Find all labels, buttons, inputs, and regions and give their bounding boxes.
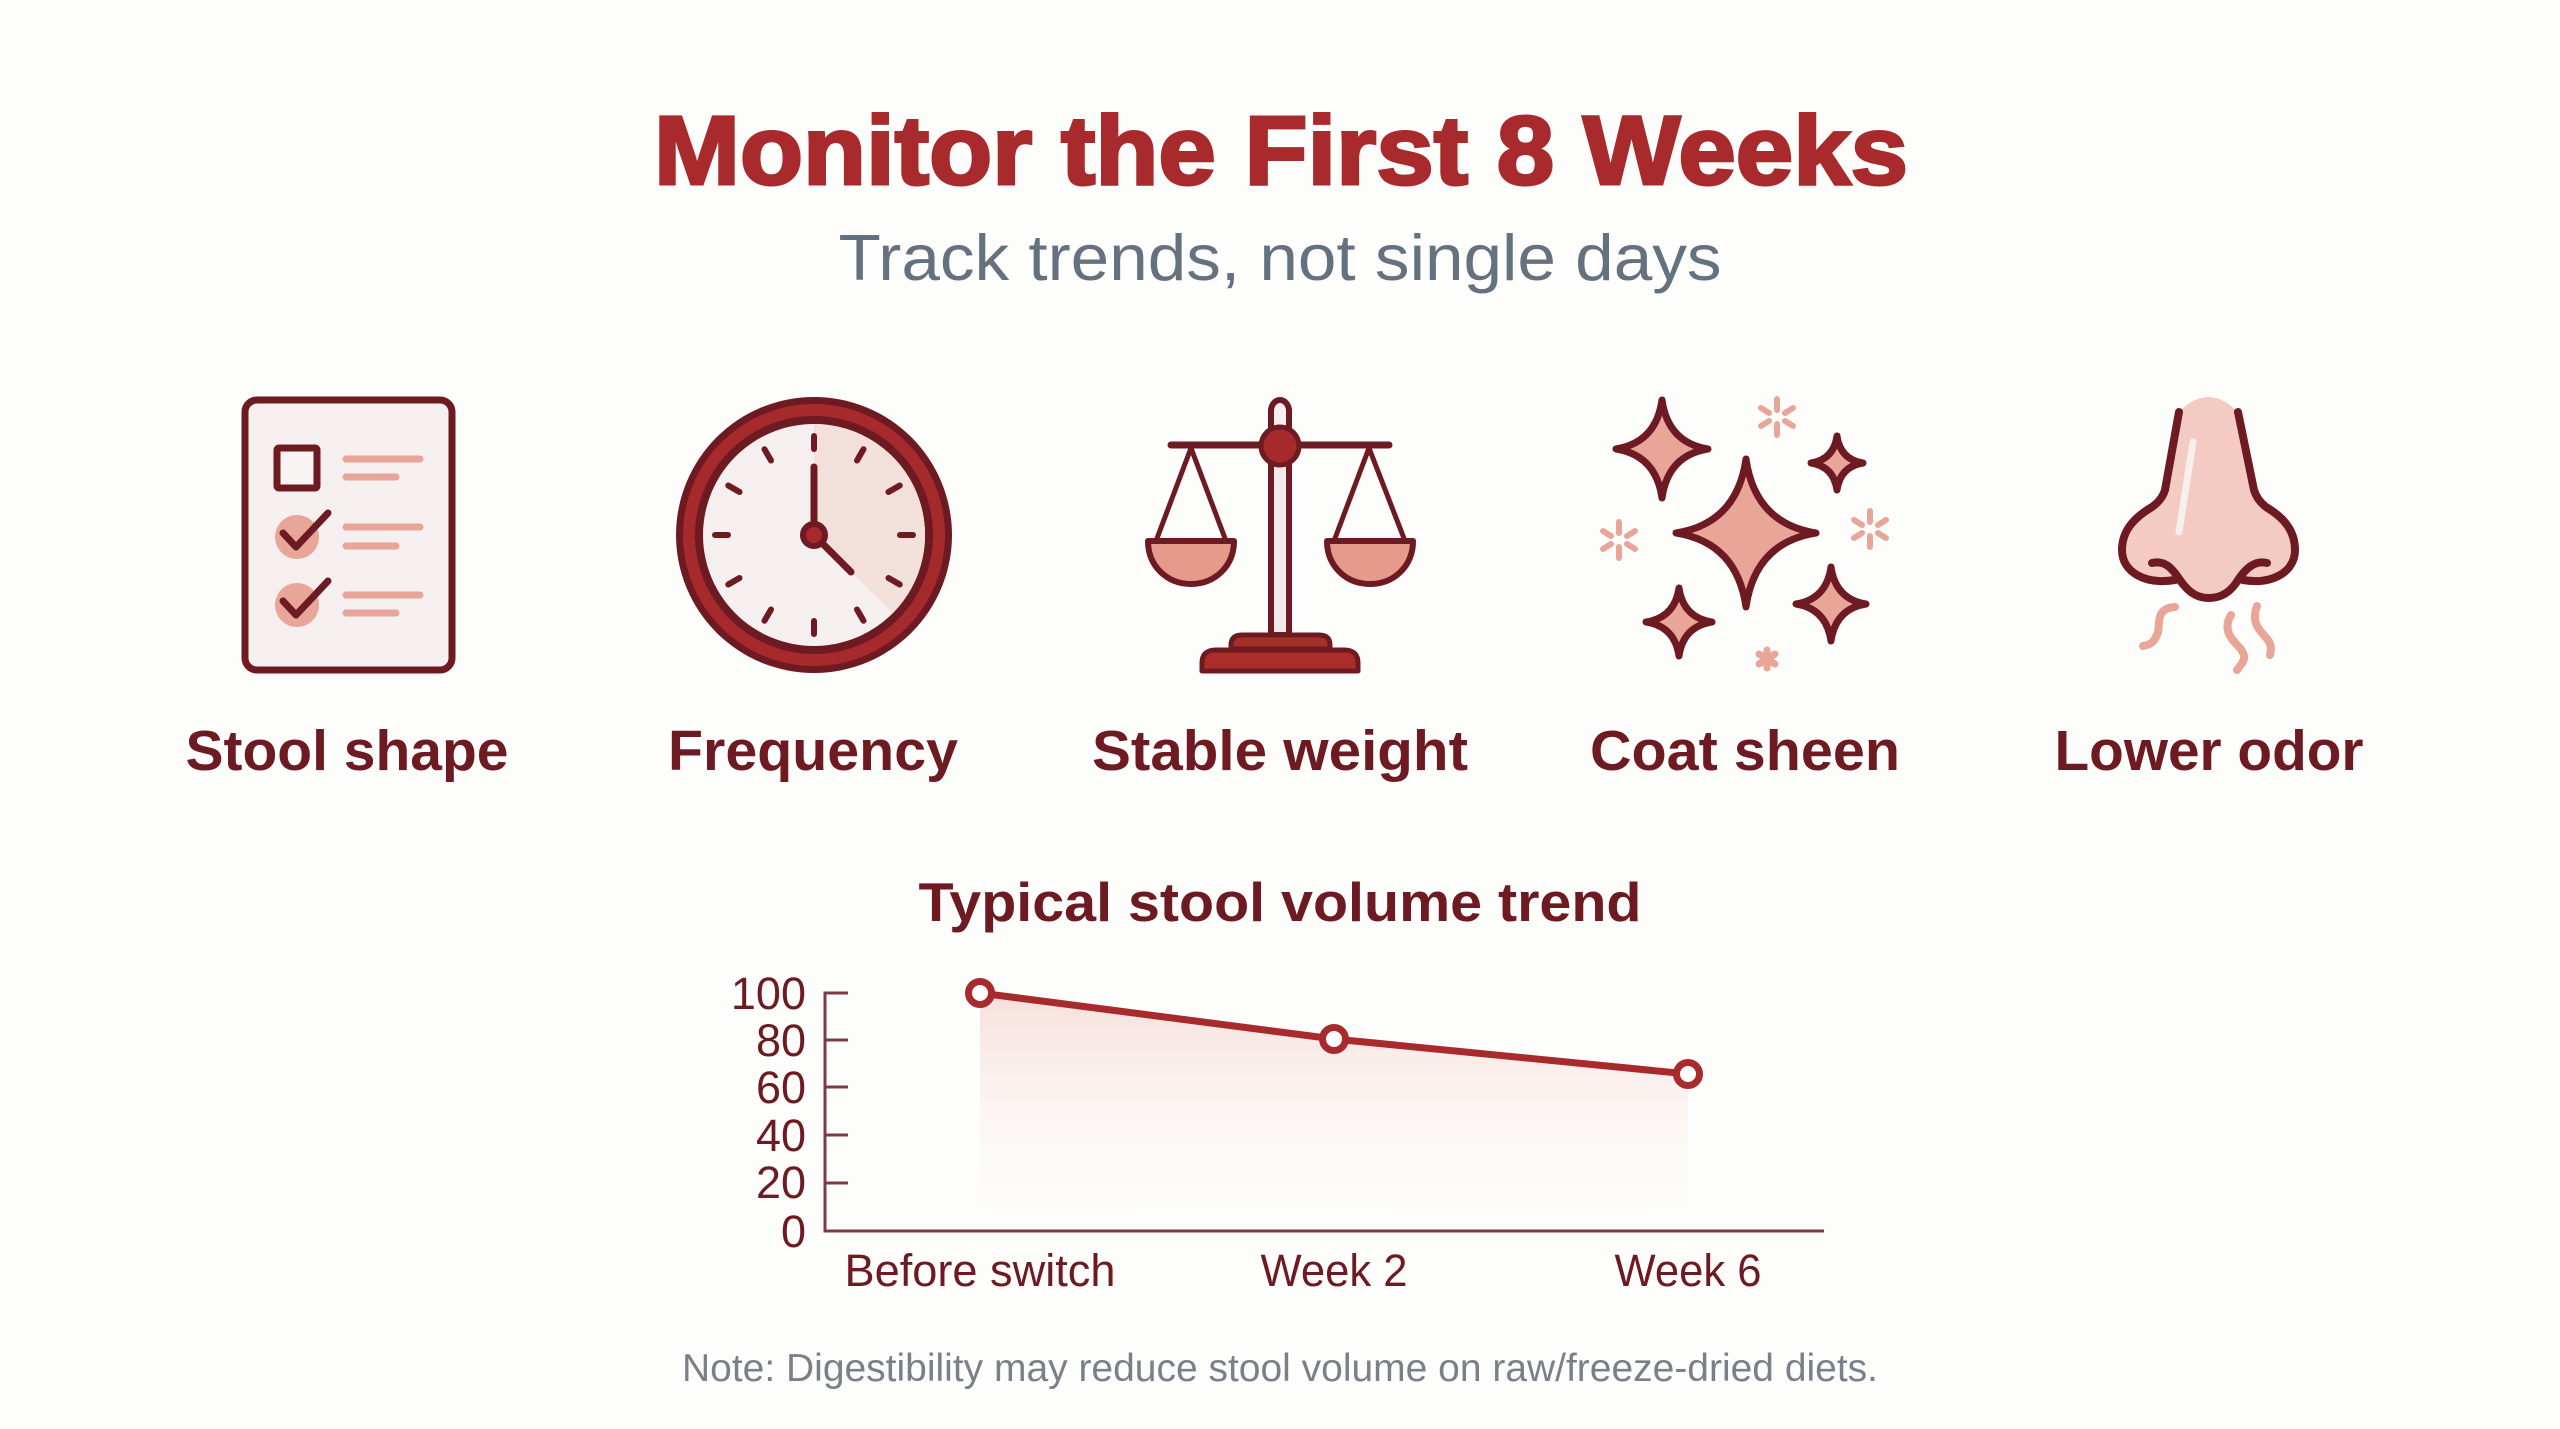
label: stool shape: Stool shape (186, 719, 508, 783)
axes (825, 993, 1824, 1231)
icon: balance scale (1148, 400, 1413, 671)
label: stable weight: Stable weight (1092, 719, 1468, 783)
note: Note: Digestibility may reduce stool volume on raw/freeze-dried diets. (682, 1347, 1878, 1390)
y axis labels: 60 (756, 1062, 806, 1113)
trend line (980, 993, 1688, 1074)
y axis labels: 40 (756, 1110, 806, 1161)
panel: frequency (668, 397, 958, 783)
x axis labels (844, 1245, 1762, 1296)
y axis labels: 20 (756, 1157, 806, 1208)
chart heading: Typical stool volume trend (918, 871, 1642, 933)
icon: checklist (245, 400, 452, 670)
y axis labels: 100 (731, 968, 806, 1019)
area under line (980, 993, 1688, 1228)
title: Monitor the First 8 Weeks (654, 96, 1908, 205)
label: lower odor: Lower odor (2054, 719, 2364, 783)
y axis labels: 0 (781, 1206, 806, 1257)
icon: nose (2122, 397, 2295, 670)
icon: sparkles (1603, 399, 1886, 668)
x axis labels: Week 2 (1260, 1245, 1408, 1296)
subtitle: Track trends, not single days (838, 221, 1722, 294)
panel: coat sheen (1590, 399, 1900, 783)
label: frequency: Frequency (668, 719, 958, 783)
y axis labels: 80 (756, 1015, 806, 1066)
x axis labels: Week 6 (1614, 1245, 1762, 1296)
label: coat sheen: Coat sheen (1590, 719, 1900, 783)
data points (968, 982, 1700, 1086)
panel: stable weight (1092, 400, 1468, 783)
icon: clock (676, 397, 952, 673)
panel: stool shape (186, 400, 508, 783)
y axis labels (731, 968, 806, 1257)
panel: lower odor (2054, 397, 2364, 783)
x axis labels: Before switch (844, 1245, 1116, 1296)
line chart: stool volume trend (731, 968, 1824, 1296)
